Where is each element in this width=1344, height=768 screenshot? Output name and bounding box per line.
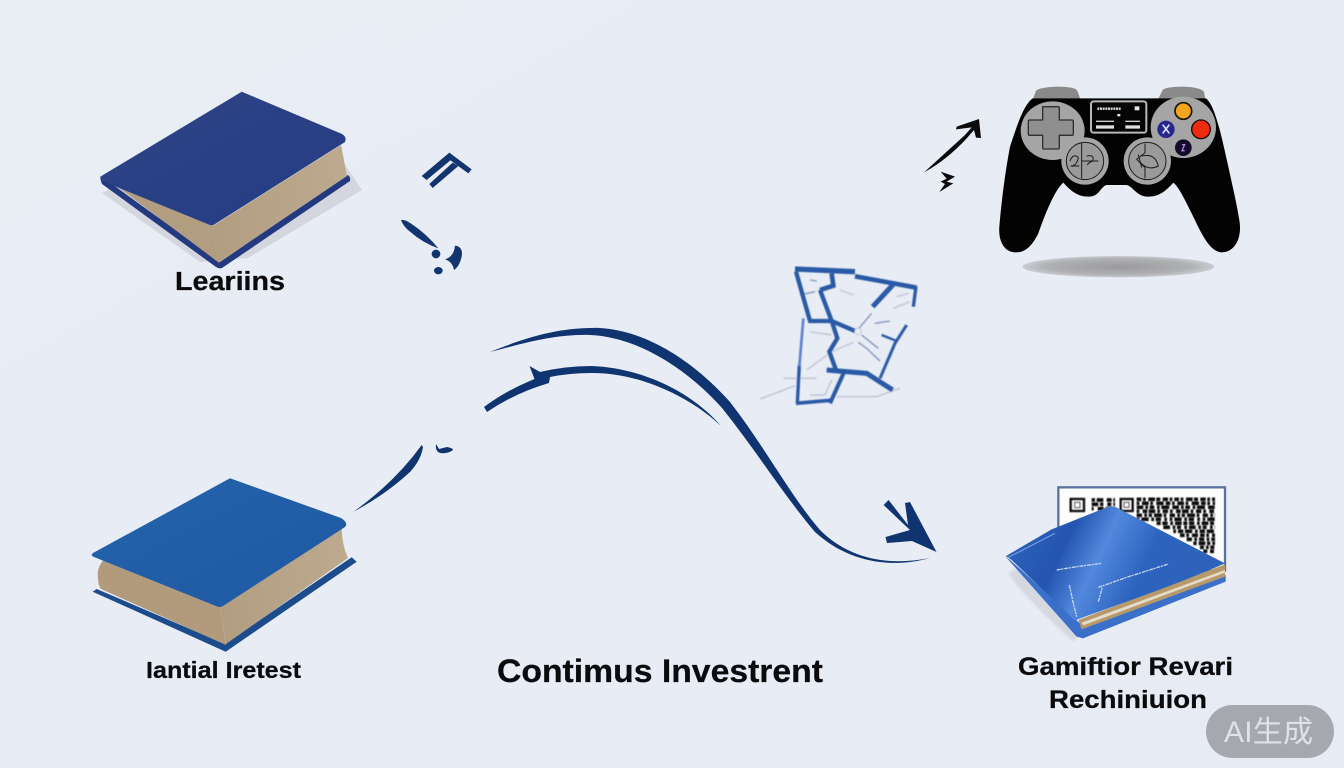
arrow: upper sweeping curve	[490, 328, 930, 563]
badge: AI generated	[1206, 705, 1334, 758]
icon: shattered glass	[760, 269, 917, 403]
icon: blue book (Initial Interest)	[92, 478, 357, 652]
icon: QR card and worn blue book	[1005, 487, 1226, 642]
icon: small arrow fragment	[436, 444, 453, 453]
label: Learning: Leariins	[175, 268, 285, 296]
arrow: small rising stroke	[354, 445, 423, 512]
icon: navy drop mark	[401, 220, 462, 274]
label: Gamification Reward Recognition: Gamiftior Revari	[1018, 653, 1233, 681]
book	[1005, 507, 1226, 642]
badge: AI generated: AI生成	[1224, 716, 1313, 749]
label: Initial Interest: Iantial Iretest	[146, 657, 301, 683]
icon: game controller	[999, 87, 1240, 277]
icon: navy book (Learning)	[100, 92, 362, 268]
label: Continuous Investment: Contimus Investrent	[497, 653, 823, 689]
icon: navy glyph mark	[422, 153, 472, 188]
arrowhead: lower right	[884, 500, 936, 552]
label: Gamification Reward Recognition: Rechiniuion	[1049, 686, 1207, 714]
arrow: lower arc	[484, 366, 721, 426]
QR card	[1058, 487, 1225, 571]
label: Gamification Reward Recognition	[1018, 653, 1233, 714]
icon: black arrow with spark	[924, 119, 981, 192]
